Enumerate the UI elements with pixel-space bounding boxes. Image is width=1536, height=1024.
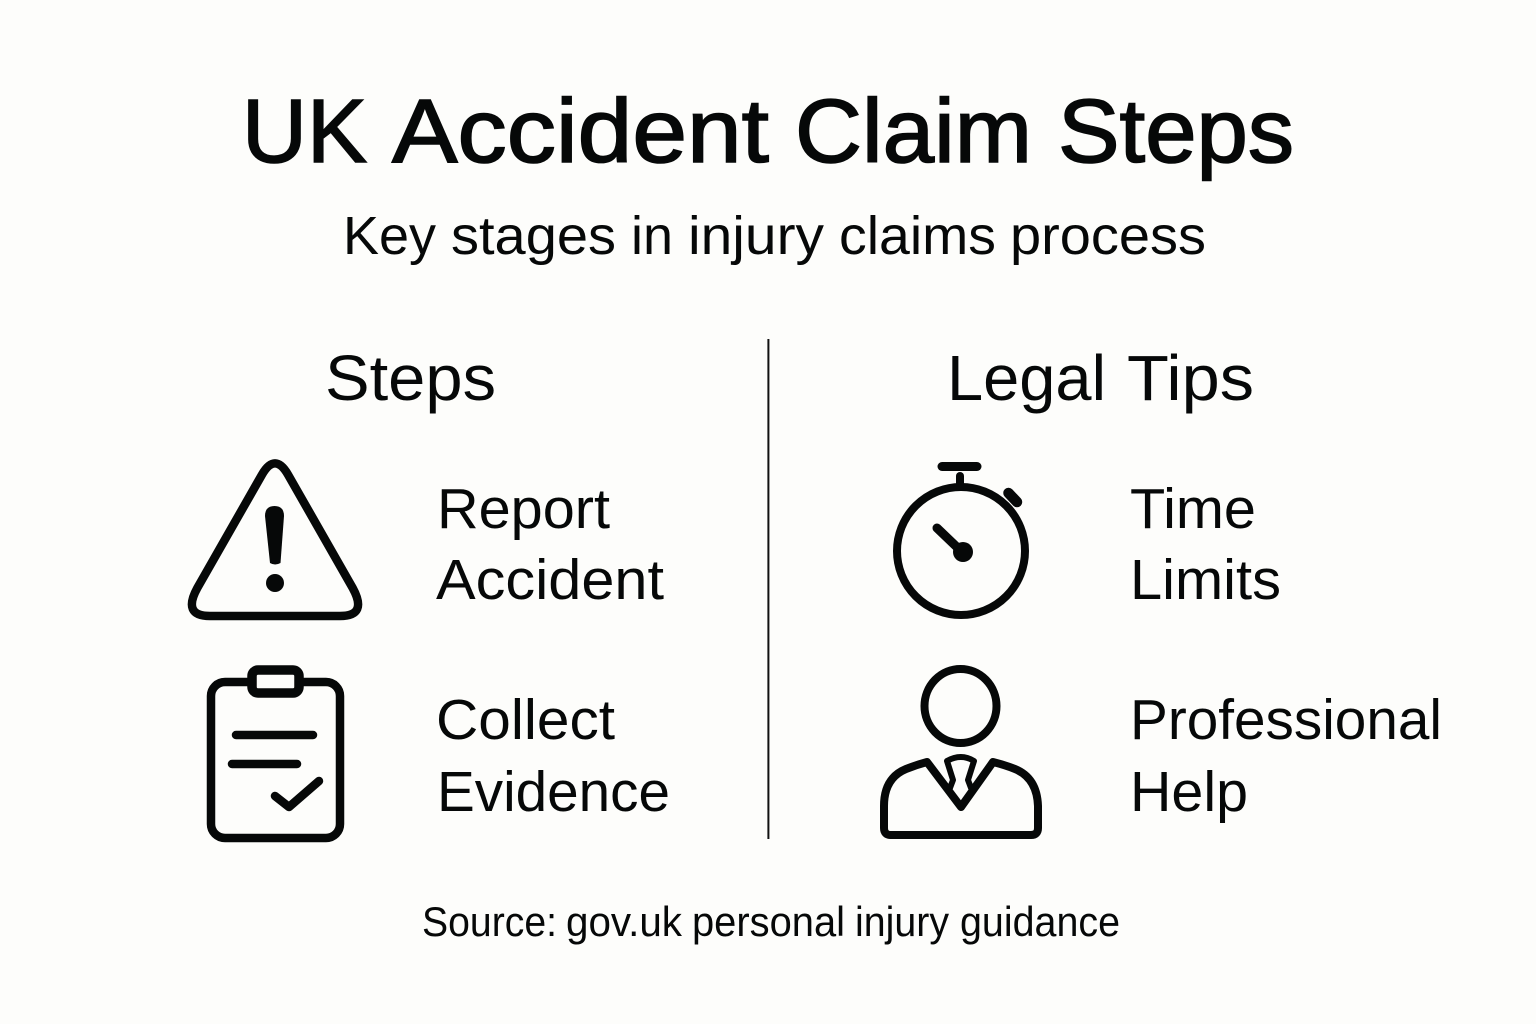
panel: legal tips <box>884 342 1442 835</box>
source note <box>422 898 1120 945</box>
label: professional help: Help <box>1130 760 1248 824</box>
icon: stopwatch <box>897 466 1025 615</box>
subtitle: stages <box>451 206 616 266</box>
title <box>242 82 1294 182</box>
source note: gov.uk <box>566 898 683 945</box>
heading: legal tips <box>947 342 1254 414</box>
label: collect evidence <box>436 688 670 824</box>
label: time limits <box>1130 477 1281 612</box>
label: report accident: Report <box>437 477 610 541</box>
icon: warning triangle <box>192 463 358 616</box>
label: professional help <box>1130 688 1442 824</box>
heading: legal tips: Legal <box>947 342 1106 414</box>
label: time limits: Limits <box>1130 548 1281 612</box>
title: Accident <box>392 82 769 182</box>
title: Claim <box>795 82 1032 182</box>
label: collect evidence: Evidence <box>437 760 670 824</box>
panel: steps <box>192 342 670 838</box>
label: collect evidence: Collect <box>436 688 615 752</box>
subtitle: process <box>1010 206 1206 266</box>
title: UK <box>242 82 367 182</box>
subtitle: in <box>631 206 673 266</box>
source note: guidance <box>960 898 1120 945</box>
icon: professional person <box>884 669 1038 835</box>
label: report accident <box>436 477 664 612</box>
source note: injury <box>855 898 949 945</box>
label: time limits: Time <box>1130 477 1256 541</box>
heading: legal tips: Tips <box>1127 342 1254 414</box>
subtitle: Key <box>343 206 436 266</box>
source note: personal <box>692 898 845 945</box>
icon: clipboard <box>211 670 340 838</box>
subtitle <box>343 206 1206 266</box>
source note: Source: <box>422 898 557 945</box>
subtitle: injury <box>688 206 824 266</box>
label: professional help: Professional <box>1130 688 1442 752</box>
label: report accident: Accident <box>436 548 664 612</box>
divider <box>767 339 769 839</box>
title: Steps <box>1058 82 1294 182</box>
subtitle: claims <box>839 206 996 266</box>
heading: steps: Steps <box>325 342 496 414</box>
